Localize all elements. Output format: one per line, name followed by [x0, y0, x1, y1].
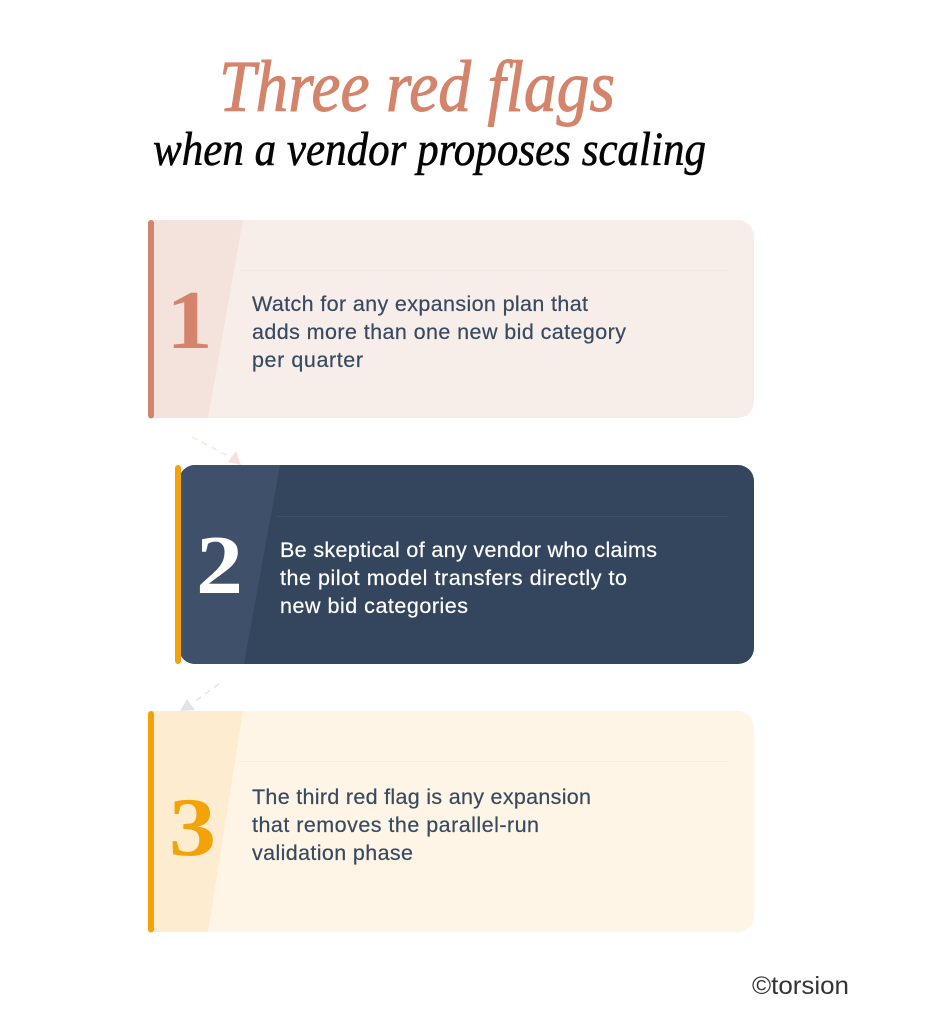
accent bar — [148, 711, 154, 932]
text: flag 2: the pilot model transfers directly to — [280, 566, 627, 590]
panel: flag 2 — [175, 465, 754, 664]
brand mark: ©torsion — [752, 972, 849, 1000]
panel: flag 3 — [148, 711, 754, 932]
number 1: 1 — [166, 274, 213, 367]
accent bar — [175, 465, 181, 664]
text: flag 1: Watch for any expansion plan that — [252, 292, 588, 316]
text: flag 2: Be skeptical of any vendor who claims — [280, 538, 657, 562]
subtitle line: when a vendor proposes scaling: when a vendor proposes scaling — [153, 123, 706, 176]
text: flag 1: per quarter — [252, 348, 363, 372]
text: flag 3: validation phase — [252, 841, 413, 865]
title — [153, 46, 706, 176]
number 2: 2 — [196, 520, 243, 612]
panel: flag 1 — [148, 220, 754, 418]
text: flag 3: that removes the parallel-run — [252, 813, 539, 837]
title line: Three red flags: Three red flags — [219, 46, 615, 127]
accent bar — [148, 220, 154, 418]
text: flag 1: adds more than one new bid category — [252, 320, 626, 344]
arrow: flag 2 to flag 3 — [180, 684, 219, 711]
arrow: flag 1 to flag 2 — [192, 437, 241, 465]
text: flag 3: The third red flag is any expansion — [252, 785, 591, 809]
number 3: 3 — [169, 782, 216, 874]
text: flag 2: new bid categories — [280, 594, 468, 618]
